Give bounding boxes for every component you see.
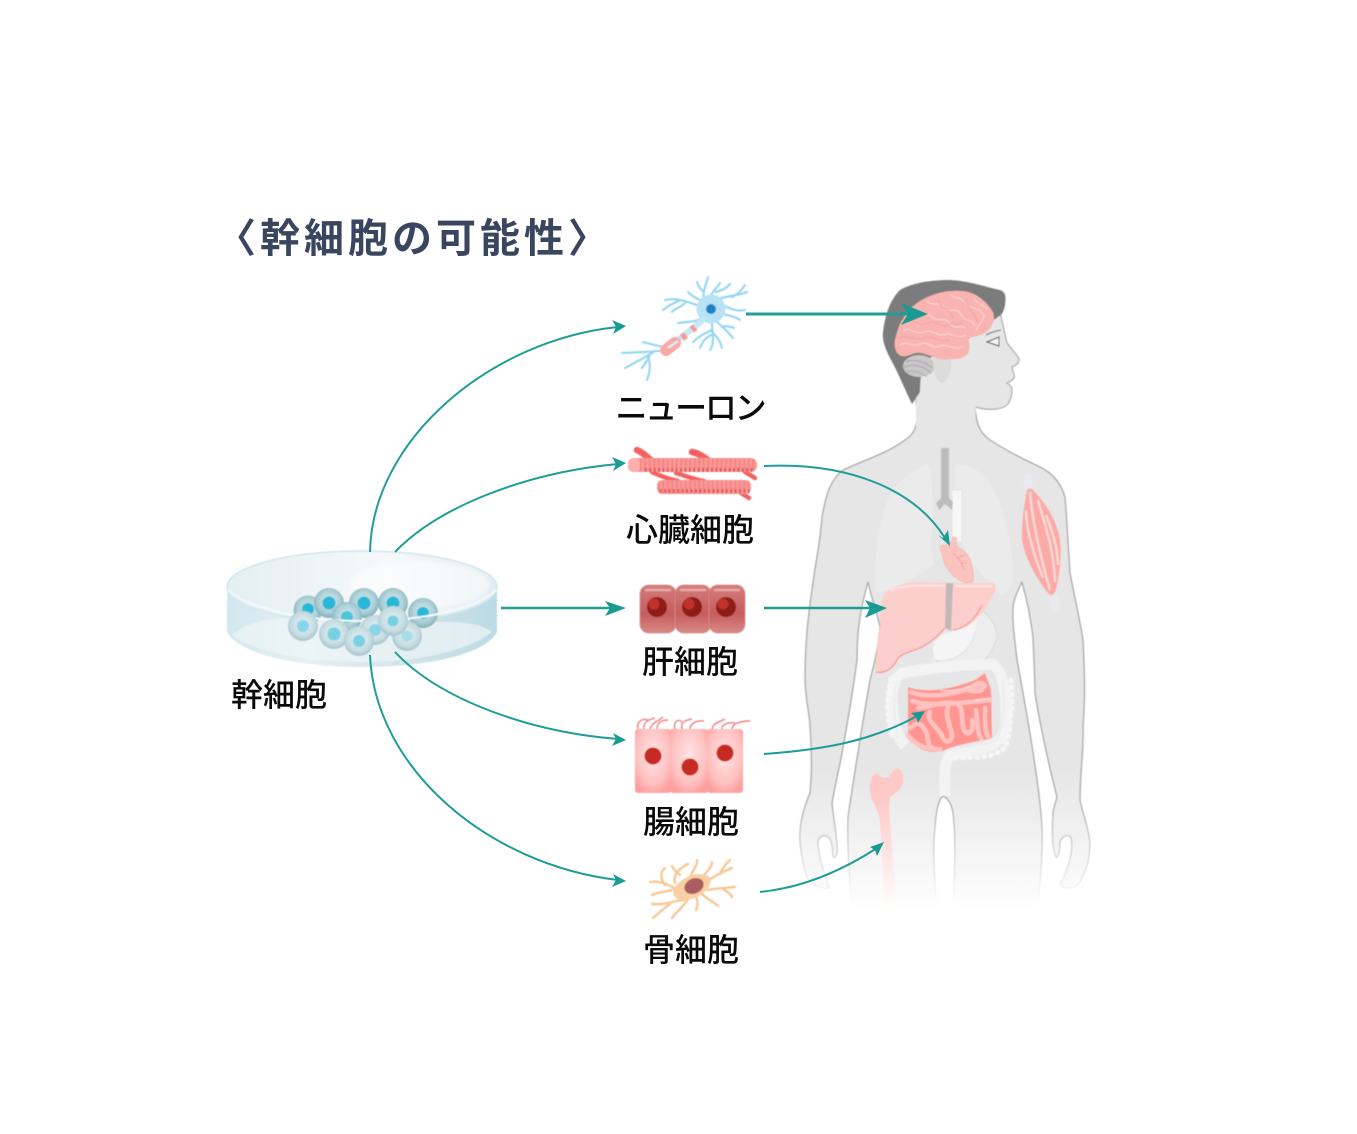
arrow: stem cell to enterocyte xyxy=(395,652,626,746)
femur xyxy=(870,768,903,910)
arrow: hepatocyte to liver xyxy=(764,600,887,618)
label: osteocyte: 骨細胞 xyxy=(643,932,739,968)
icon: osteocyte xyxy=(650,860,735,918)
label: stem cell: 幹細胞 xyxy=(231,677,327,713)
arrow: neuron to brain xyxy=(746,303,928,325)
arm muscle xyxy=(1022,473,1061,611)
label: cardiomyocyte: 心臓細胞 xyxy=(626,512,754,548)
icon: cardiac muscle fibers xyxy=(628,450,757,498)
arrow: cardiomyocyte to heart xyxy=(764,466,950,546)
arrow: stem cell to neuron xyxy=(370,320,626,552)
stomach and upper organs xyxy=(925,607,997,672)
icon: neuron xyxy=(622,277,747,380)
icon: hepatocytes xyxy=(640,585,745,633)
front row of cells xyxy=(288,606,422,656)
petri dish with stem cells xyxy=(227,551,497,667)
small intestine xyxy=(908,673,992,752)
lungs xyxy=(875,465,1013,594)
label: neuron: ニューロン xyxy=(615,390,765,426)
colon xyxy=(888,664,1012,796)
label: enterocyte: 腸細胞 xyxy=(643,804,739,840)
label: hepatocyte: 肝細胞 xyxy=(642,644,738,680)
brain xyxy=(895,291,994,359)
hair xyxy=(883,280,1005,404)
arrow: osteocyte to femur xyxy=(760,842,884,892)
icon: intestinal cells xyxy=(635,717,750,793)
head xyxy=(916,300,1019,409)
heart xyxy=(940,537,973,583)
arrow: stem cell to osteocyte xyxy=(370,655,626,887)
human body illustration xyxy=(800,280,1090,913)
back row of cells xyxy=(294,588,438,632)
trachea and esophagus xyxy=(936,448,962,542)
arrow: stem cell to hepatocyte xyxy=(501,601,626,616)
dish body xyxy=(227,587,497,667)
arrow: stem cell to cardiomyocyte xyxy=(395,457,626,552)
arrow: enterocyte to intestine xyxy=(764,711,925,754)
liver xyxy=(875,582,996,673)
eye and eyebrow xyxy=(986,330,1001,346)
dish rim highlight xyxy=(228,590,496,621)
body silhouette xyxy=(800,380,1090,913)
cerebellum and brainstem xyxy=(903,355,951,383)
title: 〈幹細胞の可能性〉 xyxy=(216,217,612,261)
